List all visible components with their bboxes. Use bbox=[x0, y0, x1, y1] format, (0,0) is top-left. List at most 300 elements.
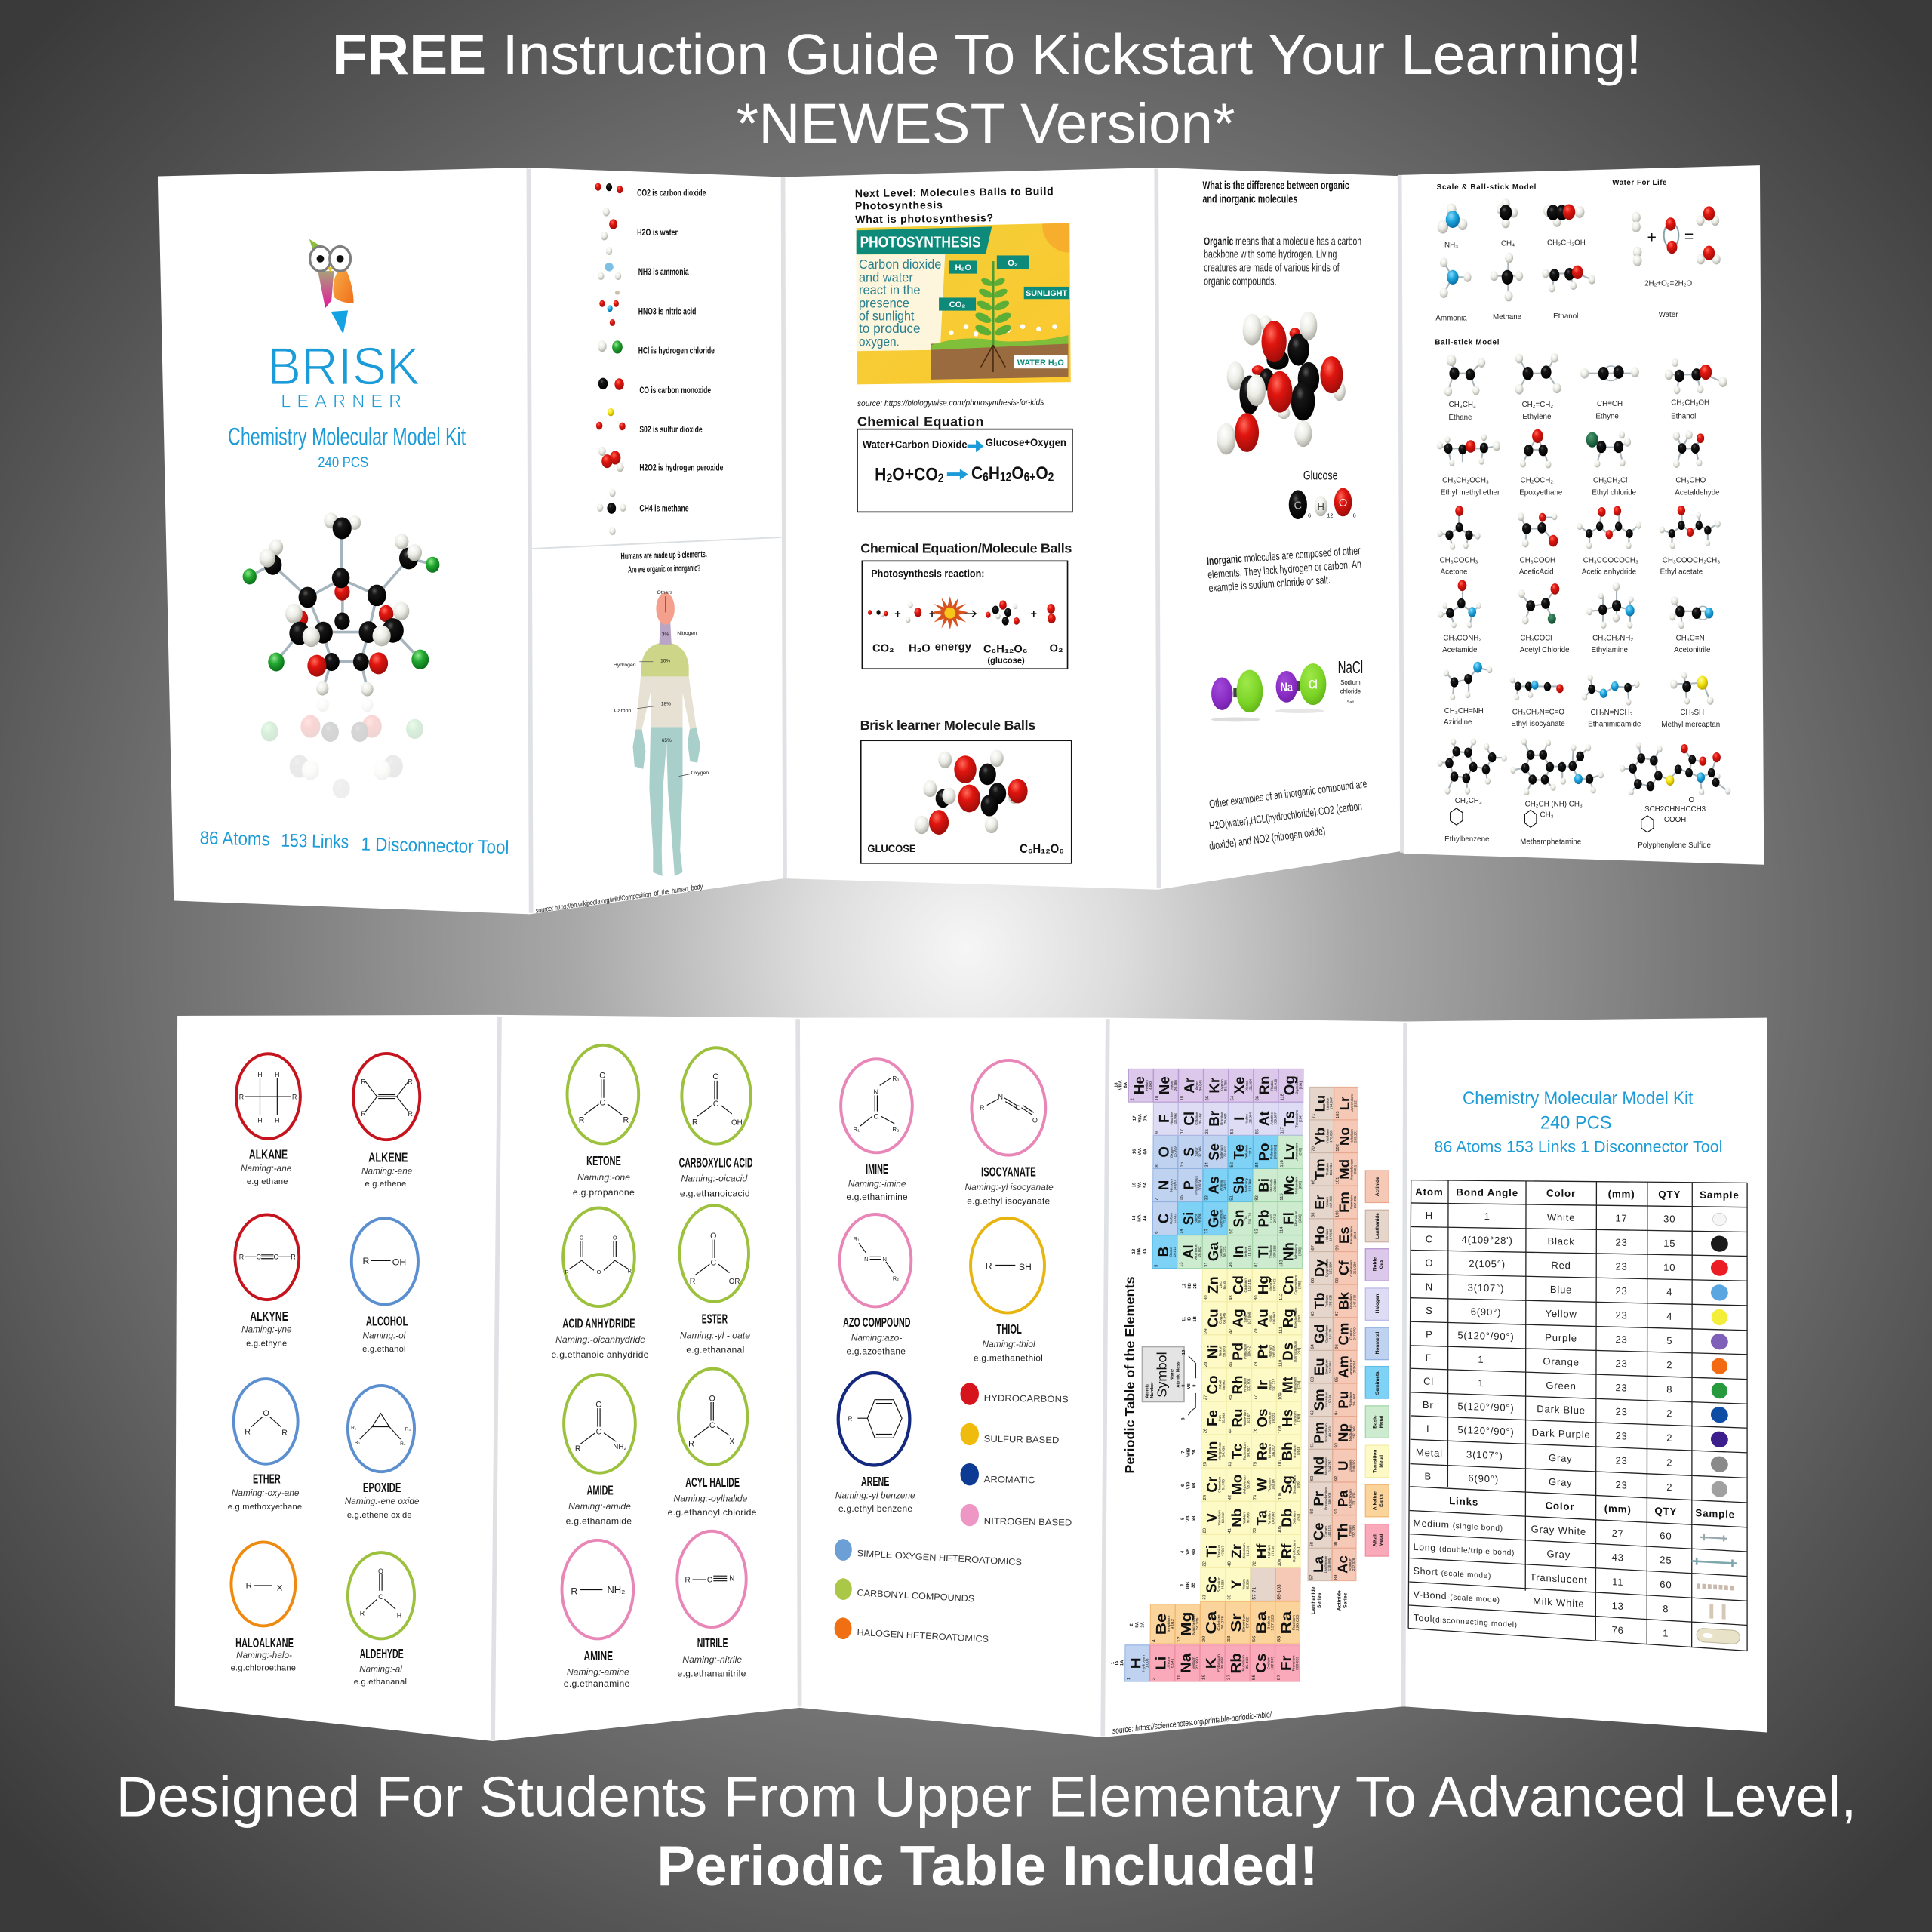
group: aldehyde: R bbox=[360, 1609, 365, 1617]
group: nitrile: N bbox=[729, 1575, 734, 1583]
period 5: 46 bbox=[1229, 1362, 1233, 1367]
group labels: VA bbox=[1138, 1181, 1143, 1188]
group labels: 16 bbox=[1133, 1149, 1137, 1154]
group: alcohol bbox=[352, 1218, 418, 1354]
period 5: Tin bbox=[1244, 1216, 1248, 1221]
group: amide: NH₂ bbox=[613, 1443, 626, 1451]
lanthanides: 71 bbox=[1312, 1114, 1316, 1118]
period 3: 32.066 bbox=[1198, 1146, 1202, 1157]
table row: P: 5 bbox=[1666, 1335, 1672, 1346]
period 5: In bbox=[1230, 1245, 1246, 1258]
period 6: Tl bbox=[1255, 1245, 1271, 1258]
table row: short link bbox=[1414, 1564, 1734, 1594]
period 6: Tungsten bbox=[1268, 1477, 1272, 1492]
molecule: H2O2: H2O2 is hydrogen peroxide bbox=[639, 463, 724, 473]
molecule: methamphetamine bbox=[1510, 738, 1604, 846]
chart: human body composition: 3% bbox=[662, 632, 669, 637]
period 7: 226.025 bbox=[1296, 1614, 1300, 1631]
period 5: Cd bbox=[1230, 1275, 1246, 1294]
table row: I: I bbox=[1426, 1423, 1429, 1434]
table row: medium link bbox=[1414, 1517, 1727, 1545]
period 6: Pt bbox=[1254, 1344, 1271, 1358]
photosynthesis illustration: oxygen. bbox=[859, 334, 900, 349]
period 3: S bbox=[1181, 1147, 1197, 1157]
chemical equation box: 6 bbox=[983, 471, 989, 485]
actinides: Lawrencium bbox=[1350, 1094, 1354, 1112]
period 5: Rh bbox=[1229, 1375, 1245, 1394]
period 7: [278] bbox=[1297, 1381, 1301, 1389]
period 4: 24 bbox=[1203, 1494, 1208, 1500]
period 5: 98.907 bbox=[1247, 1446, 1251, 1457]
period 6: Radon bbox=[1270, 1080, 1274, 1091]
period 4: Kr bbox=[1206, 1077, 1222, 1094]
table row: Br: 23 bbox=[1615, 1406, 1628, 1417]
table row: links header bbox=[1449, 1495, 1735, 1521]
lanthanides: 62 bbox=[1310, 1410, 1315, 1415]
table row: O: 10 bbox=[1663, 1262, 1675, 1273]
photosynthesis illustration: of sunlight bbox=[859, 308, 914, 323]
table row: B: 23 bbox=[1615, 1479, 1628, 1491]
group: alcohol: R bbox=[362, 1256, 369, 1266]
group labels: 4B bbox=[1192, 1549, 1196, 1555]
table row: links header: Color bbox=[1545, 1500, 1574, 1512]
molecule: water reaction: = bbox=[1684, 228, 1694, 245]
actinides: Ac bbox=[1334, 1555, 1350, 1574]
molecule: epoxyethane: CH₂OCH₂ bbox=[1521, 476, 1553, 485]
period 6: 75 bbox=[1254, 1461, 1258, 1466]
group: thiol: e.g.methanethiol bbox=[974, 1352, 1043, 1363]
actinides: 243.061 bbox=[1352, 1361, 1356, 1373]
period 1: H bbox=[1128, 1657, 1144, 1669]
actinides: [262] bbox=[1354, 1100, 1358, 1107]
group labels: 2B bbox=[1193, 1283, 1198, 1289]
molecule: CO2: CO2 is carbon dioxide bbox=[637, 188, 706, 198]
photosynthesis illustration: Carbon dioxide bbox=[859, 257, 941, 272]
period 4: Titanium bbox=[1217, 1544, 1221, 1558]
group: aldehyde: ALDEHYDE bbox=[360, 1646, 404, 1661]
group labels: 14 bbox=[1132, 1215, 1137, 1220]
group labels: 7 bbox=[1181, 1451, 1186, 1454]
group labels: 13 bbox=[1132, 1248, 1137, 1254]
period 6: Po bbox=[1256, 1143, 1272, 1161]
group: azo compound: N bbox=[883, 1256, 887, 1263]
photosynthesis reaction box: (glucose) bbox=[987, 656, 1025, 665]
group labels: 4 bbox=[1180, 1550, 1185, 1553]
group: acyl halide: Naming:-oylhalide bbox=[673, 1493, 748, 1503]
logo wordmark: LEARNER bbox=[281, 392, 401, 412]
period 6: 183.84 bbox=[1272, 1479, 1275, 1490]
legend: element categories: Nonmetal bbox=[1375, 1332, 1380, 1354]
chemical equation box: Chemical Equation bbox=[857, 414, 984, 429]
period 3: 11 bbox=[1177, 1675, 1181, 1680]
period 6: 76 bbox=[1254, 1429, 1258, 1433]
group: nitrile: e.g.ethananitrile bbox=[677, 1668, 746, 1678]
molecule: HNO3: HNO3 is nitric acid bbox=[638, 306, 696, 316]
legend: functional group colours: NITROGEN BASED bbox=[984, 1516, 1072, 1528]
molecule: acetonitrile: Acetonitrile bbox=[1674, 646, 1710, 654]
period 5: 51 bbox=[1230, 1195, 1235, 1201]
legend: functional group colours: HALOGEN HETEROATOMICS bbox=[857, 1627, 989, 1644]
heading: next level: Photosynthesis bbox=[855, 198, 943, 212]
arrow bbox=[947, 469, 968, 480]
period 2: 10 bbox=[1155, 1095, 1160, 1100]
table row: Br: 2 bbox=[1666, 1407, 1672, 1419]
period 7: 110 bbox=[1279, 1359, 1284, 1367]
table row: Metal: 2 bbox=[1666, 1457, 1672, 1469]
table row: P bbox=[1426, 1326, 1728, 1350]
molecule: HCl: HCl is hydrogen chloride bbox=[638, 346, 715, 356]
group: acyl halide: O bbox=[709, 1394, 715, 1403]
series labels: Series bbox=[1343, 1592, 1348, 1608]
table row: Metal bbox=[1416, 1444, 1728, 1472]
group: thiol: SH bbox=[1019, 1262, 1032, 1272]
group labels: 5A bbox=[1143, 1181, 1148, 1188]
table row: B: 2 bbox=[1666, 1481, 1672, 1493]
group: ether: Naming:-oxy-ane bbox=[232, 1488, 300, 1498]
period 4: 58.693 bbox=[1222, 1346, 1226, 1357]
period 5: 44 bbox=[1229, 1428, 1233, 1433]
source: sciencenotes: source: https://sciencenotes.org/printable-periodic-table/ bbox=[1112, 1710, 1273, 1736]
group: ether: R bbox=[245, 1427, 251, 1436]
period 7: 104 bbox=[1278, 1558, 1282, 1567]
table row: S: 6(90°) bbox=[1471, 1306, 1501, 1318]
group: amine: Naming:-amine bbox=[567, 1667, 629, 1678]
period 3: Argon bbox=[1195, 1081, 1198, 1090]
period 5: Tc bbox=[1229, 1444, 1245, 1459]
period 3: Chlorine bbox=[1195, 1112, 1198, 1125]
period 7: Mt bbox=[1279, 1376, 1295, 1393]
period 6: 72 bbox=[1253, 1561, 1257, 1567]
chemical equation box: 6+ bbox=[1024, 471, 1035, 485]
table row: tool: Tool(disconnecting model) bbox=[1414, 1612, 1518, 1629]
molecule list bbox=[595, 183, 724, 535]
group: acyl halide: R bbox=[688, 1440, 694, 1449]
period 5: 88.906 bbox=[1246, 1579, 1250, 1589]
table row: S: 23 bbox=[1615, 1309, 1628, 1321]
period 3: Aluminum bbox=[1194, 1244, 1198, 1260]
group labels: 6A bbox=[1143, 1148, 1148, 1155]
title: free instruction guide: *NEWEST Version* bbox=[737, 91, 1235, 155]
molecule: methyl mercaptan: Methyl mercaptan bbox=[1661, 721, 1720, 729]
molecule: acetone: Acetone bbox=[1441, 568, 1467, 577]
lanthanides: 140.908 bbox=[1327, 1492, 1331, 1505]
period 5: Palladium bbox=[1244, 1344, 1247, 1359]
period 3: 30.974 bbox=[1198, 1180, 1202, 1190]
period 2: N bbox=[1155, 1180, 1171, 1190]
period 7: 115 bbox=[1280, 1193, 1284, 1201]
group: imine bbox=[841, 1059, 912, 1202]
text: inorganic definition bbox=[1207, 545, 1363, 595]
period 4: 36 bbox=[1205, 1096, 1210, 1100]
period 5: 39 bbox=[1227, 1595, 1232, 1600]
period 6: 56 bbox=[1252, 1635, 1257, 1642]
table row: I: 2 bbox=[1666, 1432, 1672, 1444]
key: symbol box: Symbol bbox=[1154, 1352, 1169, 1398]
group: epoxide: R₄ bbox=[400, 1441, 406, 1447]
period 2: 8 bbox=[1155, 1164, 1159, 1168]
period 3: Magnesium bbox=[1192, 1614, 1196, 1635]
photosynthesis illustration: to produce bbox=[859, 321, 921, 336]
table row: N: 3(107°) bbox=[1468, 1282, 1504, 1294]
group: alkyne: C bbox=[257, 1254, 262, 1261]
table row: S: 4 bbox=[1666, 1311, 1672, 1322]
period 7: Dubnium bbox=[1293, 1511, 1297, 1524]
group: ether bbox=[228, 1379, 302, 1512]
glucose legend: 6 bbox=[1353, 512, 1356, 519]
group: amide: R bbox=[575, 1444, 581, 1454]
molecule: ethanimidamide bbox=[1582, 675, 1641, 729]
headings bbox=[1435, 179, 1667, 346]
period 5: Molybdenum bbox=[1242, 1475, 1247, 1494]
period 5: Cadmium bbox=[1244, 1278, 1247, 1292]
period 7: 116 bbox=[1280, 1160, 1284, 1168]
group: alkene bbox=[353, 1054, 420, 1189]
period 7: [289] bbox=[1298, 1214, 1302, 1223]
period 1: 2 bbox=[1131, 1098, 1135, 1100]
group labels bbox=[1111, 1079, 1199, 1666]
lanthanides: Holmium bbox=[1325, 1228, 1329, 1242]
group: ketone: O bbox=[599, 1072, 606, 1081]
molecule: ethyl chloride: CH₃CH₂Cl bbox=[1593, 476, 1627, 485]
lanthanides: 150.36 bbox=[1328, 1394, 1332, 1405]
group labels: 3 bbox=[1180, 1583, 1185, 1586]
period 5: 126.904 bbox=[1248, 1112, 1252, 1125]
table row: links header: QTY bbox=[1654, 1505, 1677, 1518]
group: azo compound: e.g.azoethane bbox=[846, 1346, 906, 1356]
molecule: CO: CO is carbon monoxide bbox=[639, 385, 711, 395]
period 3: 24.305 bbox=[1195, 1617, 1200, 1630]
group: thiol bbox=[971, 1218, 1044, 1363]
photosynthesis reaction box: energy bbox=[935, 641, 972, 654]
photosynthesis reaction box: H₂O bbox=[909, 642, 931, 654]
table row: long link: Gray bbox=[1547, 1548, 1571, 1561]
legend: element categories: Alkaline bbox=[1373, 1491, 1378, 1510]
kit contents line bbox=[199, 828, 509, 858]
molecule: ethylbenzene: CH₂CH₃ bbox=[1455, 797, 1482, 805]
group: ester bbox=[680, 1205, 750, 1355]
icon: owl logo bbox=[309, 239, 354, 334]
group: haloalkane: X bbox=[277, 1584, 283, 1593]
period 4: Mn bbox=[1204, 1441, 1220, 1462]
period 6: Au bbox=[1255, 1309, 1271, 1327]
photosynthesis illustration: react in the bbox=[859, 282, 921, 297]
legend: element categories: Actinide bbox=[1375, 1177, 1380, 1196]
period 6: Bi bbox=[1256, 1178, 1272, 1192]
photosynthesis illustration: SUNLIGHT bbox=[1026, 289, 1068, 298]
period 5: 42 bbox=[1228, 1495, 1232, 1500]
period 4: 26 bbox=[1204, 1429, 1208, 1433]
group: isocyanate: e.g.ethyl isocyanate bbox=[967, 1196, 1051, 1207]
lanthanides: Cerium bbox=[1324, 1526, 1327, 1537]
period 6: Bismuth bbox=[1269, 1179, 1273, 1192]
legend: functional group colours: AROMATIC bbox=[984, 1474, 1035, 1485]
lanthanides: 164.930 bbox=[1329, 1229, 1333, 1241]
group: ketone bbox=[568, 1045, 638, 1198]
table row: I: 5(120°/90°) bbox=[1457, 1424, 1515, 1438]
actinides: 97 bbox=[1335, 1311, 1340, 1316]
group: haloalkane bbox=[231, 1542, 296, 1673]
lanthanides: Ho bbox=[1312, 1226, 1327, 1244]
period 7: Nihonium bbox=[1294, 1244, 1298, 1259]
period 5: Technetium bbox=[1243, 1442, 1247, 1460]
molecule: acetic anhydride: CH₃COOCOCH₃ bbox=[1583, 556, 1638, 565]
period 2: 9.012 bbox=[1171, 1619, 1175, 1629]
group: imine: R₁ bbox=[853, 1126, 860, 1133]
group: alkene: e.g.ethene bbox=[365, 1180, 406, 1189]
group labels: VIII bbox=[1187, 1382, 1192, 1389]
period 6: Astatine bbox=[1270, 1112, 1274, 1125]
table row: short link: Short (scale mode) bbox=[1414, 1565, 1491, 1580]
legend: functional group colours: SULFUR BASED bbox=[984, 1434, 1060, 1445]
molecule: CH4 scale: CH₄ bbox=[1501, 240, 1515, 248]
actinides: Th bbox=[1335, 1523, 1350, 1540]
group labels: 8 bbox=[1181, 1417, 1186, 1420]
actinides: 231.036 bbox=[1352, 1492, 1355, 1505]
period 4: Se bbox=[1206, 1143, 1222, 1161]
period 7: 113 bbox=[1279, 1260, 1284, 1267]
group: amide bbox=[564, 1374, 635, 1527]
lanthanides: La bbox=[1310, 1555, 1326, 1573]
legend: functional group colours: SIMPLE OXYGEN HETEROATOMICS bbox=[857, 1548, 1022, 1567]
legend: element categories: Alkali bbox=[1373, 1534, 1378, 1547]
period 6: 57-71 bbox=[1252, 1587, 1257, 1600]
table row: B bbox=[1424, 1468, 1727, 1497]
molecule: NH3: NH3 is ammonia bbox=[638, 266, 689, 277]
group: ketone: R bbox=[623, 1115, 629, 1124]
actinides: Uranium bbox=[1349, 1459, 1352, 1472]
period 5: Ru bbox=[1229, 1409, 1245, 1428]
group: amine: AMINE bbox=[584, 1648, 613, 1663]
period 6: Thallium bbox=[1269, 1245, 1273, 1258]
molecule: ethyl methyl ether: CH₃CH₂OCH₃ bbox=[1442, 476, 1489, 485]
molecule: aziridine: Aziridine bbox=[1444, 718, 1472, 727]
group: amine: e.g.ethanamine bbox=[564, 1678, 630, 1689]
period 1: Hydrogen bbox=[1142, 1655, 1146, 1672]
group: ester: C bbox=[710, 1259, 716, 1268]
group: acid anhydride bbox=[552, 1208, 649, 1360]
period 3: 14 bbox=[1180, 1229, 1184, 1234]
period 2: 10.811 bbox=[1173, 1246, 1177, 1257]
period 2: O bbox=[1155, 1146, 1172, 1158]
period 6: 85 bbox=[1255, 1128, 1260, 1134]
period 7: Lv bbox=[1281, 1143, 1297, 1160]
period 7: 89-103 bbox=[1277, 1584, 1282, 1600]
period 3: 26.982 bbox=[1198, 1246, 1201, 1257]
period 6: At bbox=[1256, 1111, 1272, 1126]
group: carboxylic acid bbox=[679, 1048, 753, 1198]
period 4: 35 bbox=[1205, 1128, 1210, 1134]
group: aldehyde: C bbox=[378, 1593, 383, 1601]
group labels: IIB bbox=[1188, 1283, 1192, 1289]
period 7: Radium bbox=[1292, 1614, 1297, 1630]
period 7: Francium bbox=[1292, 1655, 1296, 1671]
group labels: IB bbox=[1188, 1317, 1192, 1321]
period 4: Ti bbox=[1204, 1545, 1220, 1558]
table row: Metal: Metal bbox=[1416, 1447, 1443, 1459]
period 7: Rf bbox=[1278, 1543, 1294, 1558]
period 1: 4.003 bbox=[1149, 1081, 1152, 1090]
molecule: ethanol scale: CH₃CH₂OH bbox=[1547, 238, 1586, 247]
period 2 bbox=[1150, 1069, 1178, 1681]
actinides: 258.1 bbox=[1353, 1164, 1357, 1174]
lanthanides: Er bbox=[1312, 1195, 1327, 1210]
NaCl models bbox=[1211, 657, 1363, 721]
actinides: Californium bbox=[1349, 1260, 1353, 1277]
molecule: SO2 bbox=[596, 408, 703, 435]
period 4: Calcium bbox=[1217, 1614, 1221, 1631]
molecule: SO2: S02 is sulfur dioxide bbox=[639, 424, 703, 435]
lanthanides: Praseodymium bbox=[1324, 1487, 1328, 1510]
molecule: ethylamine: CH₃CH₂NH₂ bbox=[1592, 635, 1633, 643]
NaCl models: chloride bbox=[1340, 688, 1361, 694]
lanthanides: Erbium bbox=[1325, 1197, 1329, 1208]
table row: H: 1 bbox=[1484, 1211, 1491, 1222]
group: isocyanate: O bbox=[1032, 1116, 1038, 1124]
group: alkyne: Naming:-yne bbox=[242, 1325, 292, 1335]
group: alkane: e.g.ethane bbox=[247, 1177, 288, 1186]
panel: brisk learner cover bbox=[158, 168, 530, 914]
molecule: ethane: Ethane bbox=[1449, 414, 1472, 422]
molecule: ethyl methyl ether: Ethyl methyl ether bbox=[1441, 488, 1500, 497]
period 6: 209.987 bbox=[1273, 1112, 1278, 1125]
period 6: 79 bbox=[1254, 1328, 1259, 1334]
group: arene bbox=[835, 1373, 915, 1514]
group: alkene: R bbox=[361, 1110, 366, 1118]
molecule: methyl mercaptan: CH₃SH bbox=[1680, 709, 1704, 717]
period 7: Sg bbox=[1279, 1475, 1295, 1494]
table row: tool bbox=[1414, 1611, 1740, 1644]
period 5: 43 bbox=[1228, 1462, 1232, 1466]
kit contents line: 86 Atoms bbox=[199, 828, 270, 850]
molecule: methyl mercaptan bbox=[1661, 672, 1720, 729]
period 3: Si bbox=[1180, 1212, 1196, 1225]
legend: element categories: Gas bbox=[1379, 1260, 1384, 1269]
molecule: aziridine: CH₃CH=NH bbox=[1444, 707, 1484, 715]
heading: kit name: 240 PCS bbox=[1540, 1113, 1612, 1134]
period 4: 28 bbox=[1204, 1362, 1208, 1367]
table row: links header: Links bbox=[1449, 1495, 1478, 1508]
lanthanides: Lutetium bbox=[1326, 1097, 1330, 1110]
chemical equation box: O bbox=[1011, 463, 1024, 484]
period 2: 5 bbox=[1155, 1264, 1159, 1267]
molecule: H2O: H2O is water bbox=[637, 227, 678, 238]
period 5: Pd bbox=[1229, 1343, 1245, 1361]
period 4: 55.845 bbox=[1222, 1413, 1226, 1423]
actinides: 93 bbox=[1334, 1443, 1339, 1448]
period 4: 40.078 bbox=[1221, 1616, 1225, 1629]
period 5: 52 bbox=[1230, 1162, 1235, 1168]
chemical equation box bbox=[857, 414, 1072, 512]
period 4: 51.996 bbox=[1221, 1479, 1225, 1490]
group: haloalkane: e.g.chloroethane bbox=[231, 1664, 296, 1673]
period 3: 17 bbox=[1180, 1129, 1185, 1134]
heading: next level: What is photosynthesis? bbox=[855, 211, 993, 226]
period 3: Cl bbox=[1181, 1112, 1197, 1126]
period 7: Cn bbox=[1280, 1275, 1296, 1294]
key: symbol box: Atomic Mass bbox=[1176, 1361, 1180, 1388]
lanthanides: Samarium bbox=[1324, 1392, 1328, 1407]
period 6: Rhenium bbox=[1268, 1444, 1272, 1458]
kit name bbox=[228, 422, 466, 471]
group: acyl halide: X bbox=[729, 1437, 734, 1446]
group: isocyanate: R bbox=[980, 1104, 985, 1112]
group: acyl halide bbox=[668, 1369, 757, 1518]
group: alkene: ALKENE bbox=[368, 1150, 408, 1165]
molecule: ethane bbox=[1444, 355, 1485, 422]
text: organic definition: Organic means that a molecule has a carbon bbox=[1204, 235, 1361, 248]
period 4: Manganese bbox=[1218, 1442, 1222, 1460]
logo wordmark: BRISK bbox=[267, 336, 420, 395]
